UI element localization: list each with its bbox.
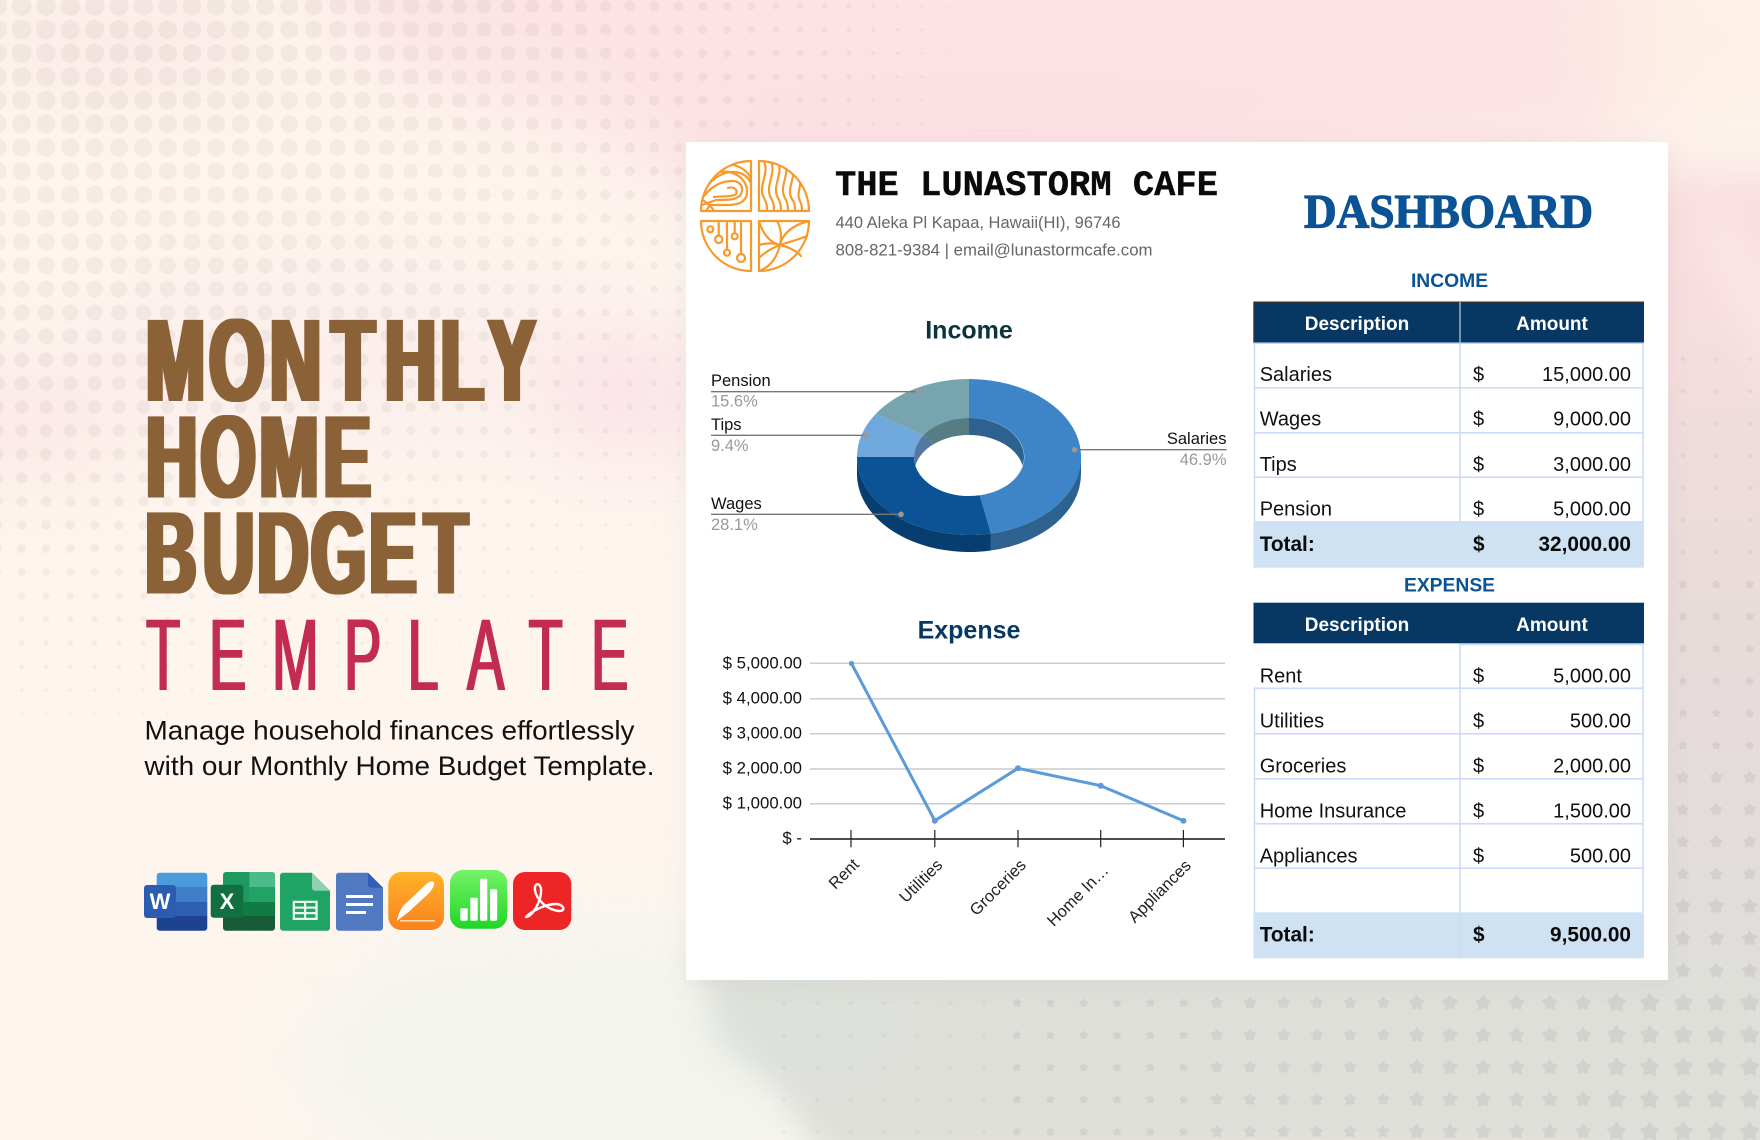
expense row: home insurance: $ bbox=[1473, 800, 1484, 822]
expense row: appliances: $ bbox=[1473, 845, 1484, 867]
chart title: income: Income bbox=[925, 317, 1013, 345]
y axis labels: $ - bbox=[782, 828, 802, 847]
heading line: BUDGET: BUDGET bbox=[145, 487, 468, 619]
leader: pension: Pension bbox=[711, 372, 771, 390]
expense row: appliances: Appliances bbox=[1260, 845, 1358, 867]
text: address and contact bbox=[836, 214, 1152, 260]
income table header: Amount bbox=[1516, 314, 1589, 335]
leader: wages: 28.1% bbox=[711, 516, 758, 534]
leader: salaries: 46.9% bbox=[1180, 451, 1227, 469]
icon: Google Sheets bbox=[280, 873, 330, 931]
income total row: $ bbox=[1473, 533, 1485, 556]
section heading: income: INCOME bbox=[1411, 271, 1488, 292]
y axis labels: $ 4,000.00 bbox=[723, 688, 802, 707]
expense row: utilities: 500.00 bbox=[1570, 710, 1631, 732]
expense table header: Amount bbox=[1516, 615, 1589, 636]
leader: wages bbox=[711, 495, 904, 534]
icon: Google Docs bbox=[336, 873, 383, 931]
income total row: 32,000.00 bbox=[1538, 533, 1631, 556]
y axis labels bbox=[723, 653, 802, 847]
icon: Excel: X bbox=[220, 889, 235, 914]
icon: cafe logo bbox=[701, 160, 809, 271]
y axis labels: $ 3,000.00 bbox=[723, 723, 802, 742]
table: income bbox=[1254, 271, 1644, 568]
y axis labels: $ 2,000.00 bbox=[723, 758, 802, 777]
income row: tips bbox=[1260, 454, 1631, 476]
icon: Word bbox=[144, 872, 208, 931]
expense row: utilities bbox=[1260, 710, 1631, 732]
section heading: expense: EXPENSE bbox=[1404, 575, 1495, 596]
expense row: home insurance: Home Insurance bbox=[1260, 800, 1406, 822]
x axis labels: Rent bbox=[825, 855, 863, 893]
donut 3D ring bbox=[857, 379, 1081, 552]
income total row bbox=[1254, 522, 1644, 568]
expense row: groceries: $ bbox=[1473, 755, 1484, 777]
income row: tips: $ bbox=[1473, 454, 1484, 476]
expense table header: Description bbox=[1305, 615, 1409, 636]
heading line: MONTHLY: MONTHLY bbox=[146, 294, 536, 426]
expense row: utilities: $ bbox=[1473, 710, 1484, 732]
x axis labels: Utilities bbox=[896, 856, 946, 906]
income row: wages: 9,000.00 bbox=[1553, 409, 1631, 431]
chart: expense line bbox=[723, 616, 1225, 930]
expense row: rent: $ bbox=[1473, 666, 1484, 688]
expense row: groceries: 2,000.00 bbox=[1553, 755, 1631, 777]
expense row: appliances: 500.00 bbox=[1570, 845, 1631, 867]
leader: salaries bbox=[1072, 430, 1227, 469]
expense row: groceries: Groceries bbox=[1260, 755, 1346, 777]
expense total row bbox=[1254, 912, 1644, 958]
income row: pension: Pension bbox=[1260, 499, 1332, 521]
data line bbox=[849, 661, 1186, 824]
income table header bbox=[1254, 302, 1644, 343]
income row: wages: Wages bbox=[1260, 409, 1321, 431]
expense row: rent: Rent bbox=[1260, 666, 1302, 688]
income row: salaries: 15,000.00 bbox=[1542, 364, 1631, 386]
expense row: rent bbox=[1260, 666, 1631, 688]
income row: salaries: Salaries bbox=[1260, 364, 1332, 386]
income total row: Total: bbox=[1260, 533, 1315, 556]
expense row: utilities: Utilities bbox=[1260, 710, 1324, 732]
expense total row: 9,500.00 bbox=[1550, 924, 1631, 947]
text: address and contact: 440 Aleka Pl Kapaa, Hawaii(HI), 96746 bbox=[836, 214, 1120, 232]
expense total row: Total: bbox=[1260, 924, 1315, 947]
x axis labels: Appliances bbox=[1125, 857, 1195, 926]
chart: income donut bbox=[711, 317, 1227, 552]
icon: Pages bbox=[388, 872, 444, 930]
expense row: rent: 5,000.00 bbox=[1553, 666, 1631, 688]
title: cafe name: THE LUNASTORM CAFE bbox=[835, 166, 1218, 206]
expense row: appliances bbox=[1260, 845, 1631, 867]
income row: pension bbox=[1260, 499, 1631, 521]
income row: wages: $ bbox=[1473, 409, 1484, 431]
leader: tips bbox=[711, 416, 869, 455]
icon: Word: W bbox=[150, 889, 171, 914]
income row: tips: 3,000.00 bbox=[1553, 454, 1631, 476]
income row: salaries bbox=[1260, 364, 1631, 386]
income row: salaries: $ bbox=[1473, 364, 1484, 386]
expense row: home insurance bbox=[1260, 800, 1631, 822]
expense total row: $ bbox=[1473, 924, 1485, 947]
leader: salaries: Salaries bbox=[1167, 430, 1226, 448]
app icons row bbox=[144, 870, 571, 931]
y axis labels: $ 1,000.00 bbox=[723, 793, 802, 812]
leader: tips: Tips bbox=[711, 416, 742, 434]
expense table header bbox=[1254, 603, 1644, 643]
x axis labels bbox=[825, 855, 1195, 930]
subtitle text: with our Monthly Home Budget Template. bbox=[143, 751, 655, 781]
income row: pension: $ bbox=[1473, 499, 1484, 521]
card background bbox=[686, 142, 1668, 980]
chart title: expense: Expense bbox=[918, 616, 1021, 644]
heading line: TEMPLATE: TEMPLATE bbox=[146, 598, 628, 712]
x axis labels: Groceries bbox=[967, 856, 1030, 919]
table: expense bbox=[1254, 575, 1644, 958]
heading line: HOME: HOME bbox=[146, 391, 371, 523]
y axis labels: $ 5,000.00 bbox=[723, 653, 802, 672]
subtitle text bbox=[143, 715, 655, 781]
income row: pension: 5,000.00 bbox=[1553, 499, 1631, 521]
leader: pension bbox=[711, 372, 921, 411]
income row: tips: Tips bbox=[1260, 454, 1297, 476]
subtitle text: Manage household finances effortlessly bbox=[144, 715, 635, 745]
expense row: home insurance: 1,500.00 bbox=[1553, 800, 1631, 822]
main heading: Monthly Home Budget Template bbox=[145, 294, 628, 712]
icon: Numbers bbox=[450, 870, 507, 929]
income table header: Description bbox=[1305, 314, 1409, 335]
panel: dashboard card bbox=[686, 142, 1668, 980]
expense row: groceries bbox=[1260, 755, 1631, 777]
text: address and contact: 808-821-9384 | email@lunastormcafe.com bbox=[836, 242, 1152, 260]
income row: wages bbox=[1260, 409, 1631, 431]
icon: Excel bbox=[211, 872, 275, 931]
icon: PDF bbox=[513, 872, 571, 930]
heading: dashboard: DASHBOARD bbox=[1304, 185, 1593, 238]
x axis labels: Home In… bbox=[1044, 862, 1112, 930]
leader: pension: 15.6% bbox=[711, 393, 758, 411]
leader: wages: Wages bbox=[711, 495, 762, 513]
leader: tips: 9.4% bbox=[711, 437, 749, 455]
